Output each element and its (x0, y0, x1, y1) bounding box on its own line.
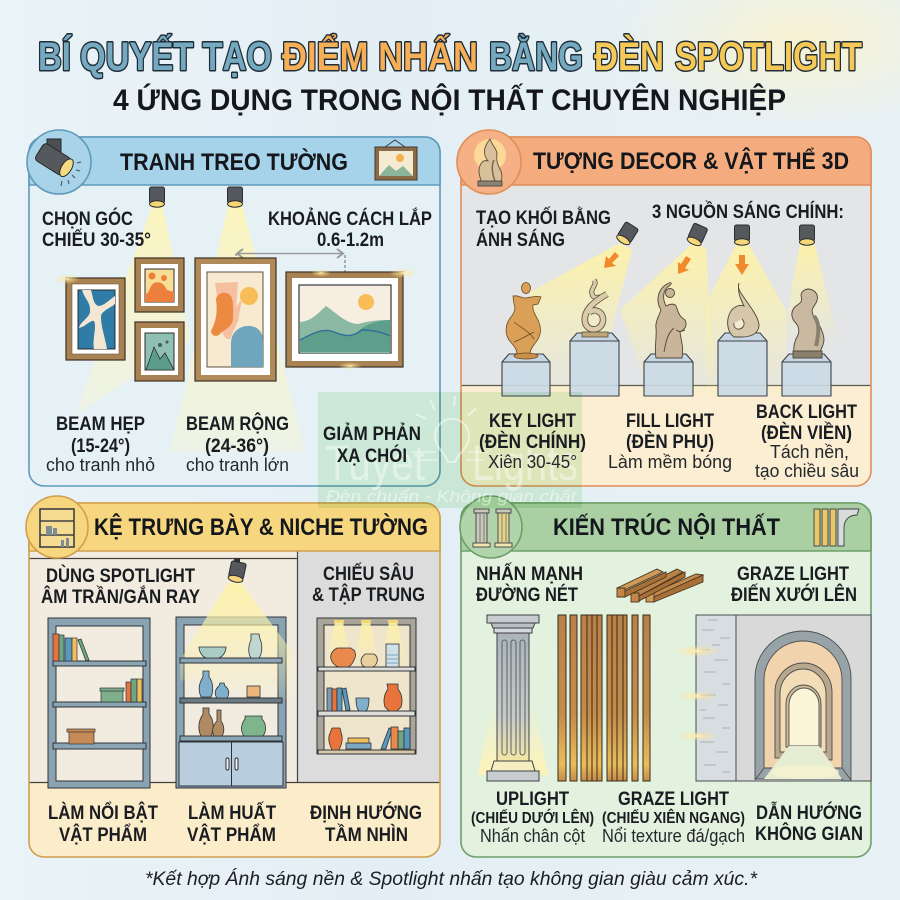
arrows (604, 252, 749, 275)
label: dẫn hướng: KHÔNG GIAN (755, 823, 863, 845)
icon badge: flame sculpture (457, 130, 521, 194)
label: graze light: Nổi texture đá/gạch (602, 826, 745, 846)
main title (38, 32, 862, 79)
frame: blue abstract (66, 278, 125, 360)
label: làm nổi bật: VẬT PHẨM (59, 824, 147, 846)
ceiling lamp 1 (150, 187, 164, 207)
label: nhấn mạnh (476, 563, 583, 606)
panel title: TRANH TREO TƯỜNG (120, 148, 348, 176)
icon badge: columns (460, 496, 522, 558)
sculpture: spiral (582, 280, 608, 337)
light beams (525, 243, 838, 396)
main title: ĐIỂM NHẤN (282, 32, 478, 79)
label: dùng spotlight: ÂM TRẦN/GẮN RAY (41, 586, 200, 608)
main title: BÍ QUYẾT TẠO (38, 33, 272, 79)
panel: kiến trúc nội thất (460, 496, 871, 857)
main title: SPOTLIGHT (675, 35, 862, 79)
label: giảm phản xạ chói: XẠ CHÓI (337, 445, 407, 467)
label: tạo khối: ÁNH SÁNG (476, 229, 565, 251)
label: key light: (ĐÈN CHÍNH) (479, 431, 586, 453)
frame: small mountain (135, 322, 184, 381)
floor (29, 782, 440, 857)
label: graze light (602, 789, 745, 846)
vases (199, 634, 266, 736)
label: định hướng: TẦM NHÌN (325, 824, 408, 846)
label: giảm phản xạ chói (323, 423, 421, 467)
header bar (29, 503, 440, 551)
floor pools of light (771, 765, 839, 779)
ceiling lamp 2 (228, 187, 242, 207)
label: định hướng (310, 802, 422, 846)
watermark brand 2: Lights (472, 435, 578, 491)
icon: slats and cornice (814, 509, 859, 546)
label: làm huất: LÀM HUẤT (188, 802, 276, 824)
watermark tagline: Đèn chuẩn - Không gian chất (326, 487, 577, 506)
label: dẫn hướng: DẪN HƯỚNG (756, 802, 862, 824)
subtitle: 4 ỨNG DỤNG TRONG NỘI THẤT CHUYÊN NGHIỆP (113, 83, 786, 117)
label: dùng spotlight (41, 565, 200, 608)
niche objects (327, 644, 410, 750)
lamp fill (686, 223, 708, 247)
pedestals (502, 333, 831, 396)
uplight fan (478, 705, 548, 775)
sculpture: gold figure (506, 282, 541, 359)
label: tạo khối (476, 207, 611, 251)
panel: tranh treo tường (27, 130, 440, 486)
label: chiếu sâu: & TẬP TRUNG (312, 584, 425, 606)
label: beam hẹp (46, 414, 155, 475)
label: uplight (471, 789, 594, 846)
panel title: KỆ TRƯNG BÀY & NICHE TƯỜNG (94, 513, 428, 541)
sculpture: dancer (655, 283, 686, 358)
label: khoảng cách lắp: 0.6-1.2m (317, 230, 384, 251)
label: chọn góc (42, 208, 151, 251)
frame: small orange (135, 258, 184, 312)
sun glow behind title (610, 0, 900, 130)
label: uplight: (CHIẾU DƯỚI LÊN) (471, 809, 594, 827)
sculpture: curl (728, 283, 759, 337)
sculpture: wave (792, 289, 824, 358)
label: uplight: UPLIGHT (496, 789, 569, 810)
lamp back (734, 225, 750, 245)
panel: tượng decor (457, 130, 871, 486)
frame: large portrait (195, 258, 276, 381)
label: fill light: (ĐÈN PHỤ) (626, 431, 714, 453)
graze glints (673, 645, 721, 741)
label: dùng spotlight: DÙNG SPOTLIGHT (46, 565, 195, 587)
label: key light (479, 411, 586, 472)
label: back light: tạo chiều sâu (755, 461, 859, 481)
niche light beams (326, 620, 408, 669)
main title: BẰNG (489, 33, 583, 79)
wall behind arch (736, 615, 871, 781)
label: fill light: FILL LIGHT (626, 411, 714, 432)
label: beam rộng: BEAM RỘNG (186, 413, 289, 435)
label: uplight: Nhấn chân cột (480, 826, 585, 846)
angled lamps (615, 222, 639, 247)
footer note: *Kết hợp Ánh sáng nền & Spotlight nhấn tạo không gian giàu cảm xúc.* (145, 869, 758, 890)
column (487, 615, 539, 781)
header bar (29, 137, 440, 185)
label: key light: KEY LIGHT (489, 411, 576, 432)
label: làm huất: VẬT PHẨM (187, 824, 276, 846)
corridor floor (764, 746, 842, 779)
label: back light (755, 402, 859, 481)
label: graze light (731, 564, 857, 606)
nested arches (755, 631, 851, 781)
watermark brand: Tuyet (325, 435, 425, 491)
niche (317, 618, 416, 754)
label: định hướng: ĐỊNH HƯỚNG (310, 802, 422, 824)
books and boxes (53, 634, 142, 744)
label: back light: BACK LIGHT (756, 402, 857, 423)
label: chiếu sâu (312, 563, 425, 606)
header bar (461, 503, 871, 551)
wood slats (558, 615, 650, 781)
icon badge: shelf (26, 496, 88, 558)
floor (461, 385, 871, 486)
lamp rim (800, 225, 814, 245)
label: làm huất (187, 802, 276, 846)
label: nhấn mạnh: ĐƯỜNG NÉT (476, 584, 578, 606)
icon: framed picture (375, 140, 417, 180)
frame: large landscape (286, 272, 403, 367)
label: khoảng cách lắp (268, 208, 432, 251)
beam on shelf (180, 583, 291, 700)
main title: ĐÈN (594, 34, 664, 79)
label: làm nổi bật (48, 802, 158, 846)
panel title: TƯỢNG DECOR & VẬT THỂ 3D (533, 147, 849, 175)
label: graze light: ĐIẾN XƯỚI LÊN (731, 584, 857, 606)
label: graze light: (CHIẾU XIÊN NGANG) (602, 809, 745, 827)
label: graze light: GRAZE LIGHT (737, 564, 849, 585)
label: fill light: Làm mềm bóng (608, 452, 732, 472)
label: back light: (ĐÈN VIỀN) (761, 422, 852, 444)
label: beam hẹp: cho tranh nhỏ (46, 455, 155, 475)
beam wide (170, 207, 305, 452)
stone wall (696, 615, 736, 781)
panel title: KIẾN TRÚC NỘI THẤT (553, 513, 780, 541)
label: back light: Tách nền, (770, 442, 849, 462)
label: 3 nguồn sáng: 3 NGUỒN SÁNG CHÍNH: (652, 201, 844, 223)
icon badge: track spotlight (27, 130, 91, 194)
label: làm nổi bật: LÀM NỔI BẬT (48, 802, 158, 824)
watermark (318, 392, 582, 508)
label: beam rộng: cho tranh lớn (186, 455, 289, 475)
label: nhấn mạnh: NHẤN MẠNH (476, 563, 583, 585)
label: beam hẹp: BEAM HẸP (56, 414, 145, 435)
label: key light: Xiên 30-45° (488, 452, 577, 472)
header bar (461, 137, 871, 185)
shelf: lit with cabinet (176, 583, 291, 788)
label: dẫn hướng (755, 802, 863, 845)
watermark bulb (412, 396, 488, 462)
label: fill light (608, 411, 732, 472)
niche wall (297, 551, 440, 782)
label: chọn góc: CHIẾU 30-35° (42, 229, 151, 251)
label: beam hẹp: (15-24°) (71, 436, 130, 457)
arrow: spacing (236, 249, 345, 272)
glints on frames (54, 268, 417, 370)
icon: wood beams (617, 569, 703, 602)
label: chọn góc: CHỌN GÓC (42, 208, 133, 230)
label: khoảng cách lắp: KHOẢNG CÁCH LẮP (268, 208, 432, 230)
shelf: plain (48, 618, 150, 788)
label: giảm phản xạ chói: GIẢM PHẢN (323, 423, 421, 445)
label: beam rộng: (24-36°) (205, 436, 269, 457)
beam narrow (75, 207, 190, 415)
panel: kệ trưng bày (26, 496, 440, 857)
label: chiếu sâu: CHIẾU SÂU (323, 563, 414, 585)
label: graze light: GRAZE LIGHT (618, 789, 729, 810)
label: tạo khối: TẠO KHỐI BẰNG (476, 207, 611, 229)
label: beam rộng (186, 413, 289, 475)
angled rail lamp (228, 558, 246, 584)
